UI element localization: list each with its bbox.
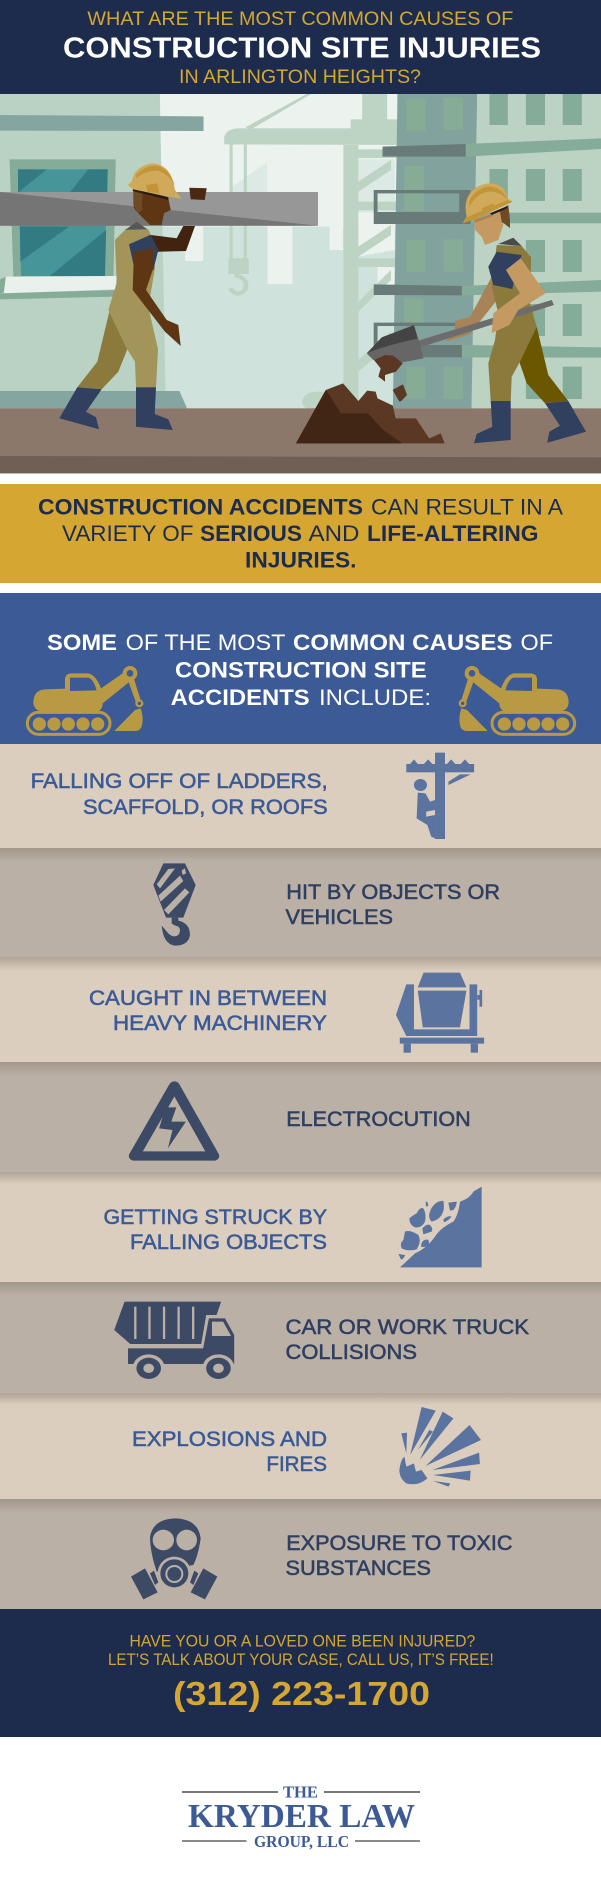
icon: cement mixer — [396, 973, 484, 1053]
text: falling off ladders: FALLING OFF OF LADDERS, — [31, 770, 328, 793]
statement line 1: CAN RESULT IN A — [371, 495, 563, 520]
statement line 2: LIFE-ALTERING — [367, 521, 538, 546]
icon: gas mask — [131, 1518, 217, 1599]
worker carrying beam — [0, 163, 318, 430]
logo: The Kryder Law Group: KRYDER LAW — [188, 1798, 415, 1835]
icon: high voltage triangle — [134, 1086, 214, 1156]
worker digging with shovel — [367, 183, 586, 443]
logo: The Kryder Law Group: GROUP, LLC — [254, 1832, 349, 1851]
statement line 2: VARIETY OF — [62, 521, 194, 546]
right buildings — [374, 94, 601, 408]
icon: excavator left — [27, 666, 143, 734]
scene backdrop — [0, 94, 601, 473]
icon: explosion — [399, 1407, 481, 1487]
text: toxic substances — [286, 1532, 512, 1580]
title line 3: IN ARLINGTON HEIGHTS? — [179, 66, 421, 88]
text: explosions — [132, 1428, 327, 1476]
text: falling objects: FALLING OBJECTS — [130, 1231, 327, 1254]
icon: utility pole climber — [406, 753, 474, 839]
dirt pile — [296, 383, 445, 443]
text: hit by objects — [286, 881, 500, 929]
text: caught in machinery: CAUGHT IN BETWEEN — [89, 987, 327, 1010]
row 8: toxic substances — [0, 1499, 601, 1609]
row 7: explosions — [0, 1393, 601, 1499]
icon: rockslide — [398, 1187, 482, 1267]
text: truck collisions — [286, 1316, 529, 1364]
statement line 1: CONSTRUCTION ACCIDENTS — [38, 495, 363, 520]
phone number: (312) 223-1700 — [173, 1676, 430, 1713]
intro line 1: OF — [520, 630, 553, 655]
icon: crane hook — [153, 863, 196, 946]
gold statement band — [0, 484, 601, 583]
statement line 2 — [62, 521, 538, 546]
row 5: falling objects — [0, 1172, 601, 1282]
statement line 2: SERIOUS — [200, 521, 302, 546]
shovel — [367, 300, 554, 402]
row 6: truck collisions — [0, 1282, 601, 1393]
text: caught in machinery — [89, 987, 327, 1035]
text: toxic substances: SUBSTANCES — [286, 1557, 431, 1580]
statement line 3: INJURIES. — [245, 548, 356, 573]
left building — [0, 94, 204, 408]
intro line 3: INCLUDE: — [319, 685, 431, 710]
statement line 1 — [38, 495, 563, 520]
text: explosions: FIRES — [266, 1453, 327, 1476]
background skyline — [161, 159, 399, 410]
text: toxic substances: EXPOSURE TO TOXIC — [286, 1532, 512, 1555]
row 4: electrocution — [0, 1062, 601, 1172]
statement line 2: AND — [308, 521, 360, 546]
illustration: construction workers on site — [0, 94, 601, 473]
intro line 1: SOME — [47, 630, 117, 655]
text: falling off ladders: SCAFFOLD, OR ROOFS — [83, 796, 328, 819]
row 3: caught in machinery — [0, 957, 601, 1062]
text: truck collisions: COLLISIONS — [286, 1341, 417, 1364]
intro line 1 — [47, 630, 553, 655]
text: truck collisions: CAR OR WORK TRUCK — [286, 1316, 529, 1339]
intro line 1: OF THE MOST — [126, 630, 286, 655]
row 1: falling — [0, 744, 601, 848]
main title: CONSTRUCTION SITE INJURIES — [63, 32, 541, 64]
row 2: hit by objects — [0, 848, 601, 957]
hard hat right — [462, 183, 513, 223]
call to action footer — [0, 1609, 601, 1737]
intro line 2: CONSTRUCTION SITE — [175, 658, 427, 683]
text: explosions: EXPLOSIONS AND — [132, 1428, 327, 1451]
header banner — [0, 0, 601, 94]
hard hat left — [128, 163, 182, 199]
text: electrocution: ELECTROCUTION — [286, 1108, 471, 1131]
text: hit by objects: VEHICLES — [286, 906, 393, 929]
icon: excavator right — [459, 666, 575, 734]
cta text — [108, 1633, 494, 1669]
carried concrete beam — [0, 188, 318, 226]
logo: The Kryder Law Group — [182, 1783, 420, 1851]
blue intro panel — [0, 593, 601, 744]
cta text: LET’S TALK ABOUT YOUR CASE, CALL US, IT’S FREE! — [108, 1651, 494, 1669]
text: falling objects: GETTING STRUCK BY — [104, 1206, 327, 1229]
logo: The Kryder Law Group: THE — [283, 1783, 318, 1802]
text: falling off ladders — [31, 770, 328, 819]
intro line 3: ACCIDENTS — [171, 685, 310, 710]
cta text: HAVE YOU OR A LOVED ONE BEEN INJURED? — [130, 1633, 475, 1651]
ground — [0, 408, 601, 473]
text: falling objects — [104, 1206, 327, 1254]
intro line 3 — [171, 685, 431, 710]
intro line 1: COMMON CAUSES — [293, 630, 512, 655]
text: caught in machinery: HEAVY MACHINERY — [113, 1012, 327, 1035]
icon: dump truck — [114, 1302, 235, 1382]
text: hit by objects: HIT BY OBJECTS OR — [286, 881, 500, 904]
title line 1: WHAT ARE THE MOST COMMON CAUSES OF — [87, 8, 513, 30]
crane — [224, 94, 399, 412]
